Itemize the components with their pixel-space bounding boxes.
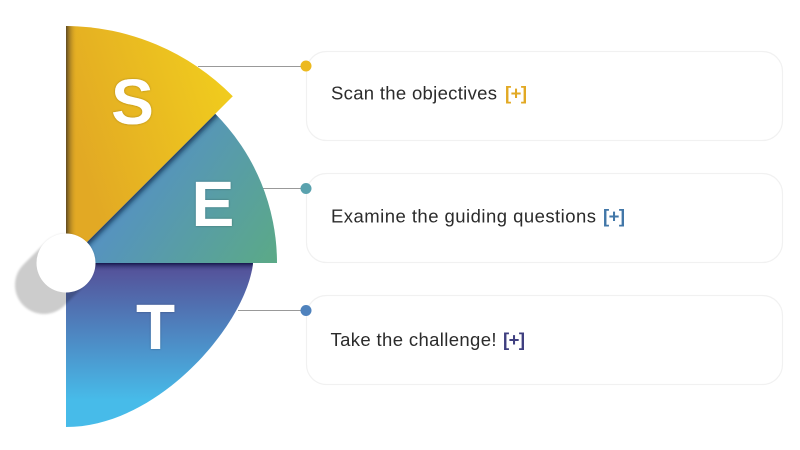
text: Scan the objectives [331,82,497,104]
toggle: [+] [505,82,527,104]
dot [300,305,312,316]
toggle: [+] [603,206,625,226]
wedge: T [66,263,253,427]
letter S: S [111,66,154,138]
card: Examine [300,174,782,262]
dot [300,60,312,72]
card: Scan [300,52,782,140]
wedge: S [66,26,233,263]
dot [300,183,312,194]
card: Take [300,296,782,384]
connector: T line [238,310,306,312]
toggle: [+] [503,329,525,350]
letter T: T [136,291,175,363]
wedge: E [87,114,277,263]
connector: S line [198,66,306,68]
hub: white circle with long shadow [36,234,96,292]
letter E: E [192,168,234,240]
connector: E line [262,188,306,190]
text: Examine the guiding questions [331,206,596,226]
text: Take the challenge! [330,329,496,350]
